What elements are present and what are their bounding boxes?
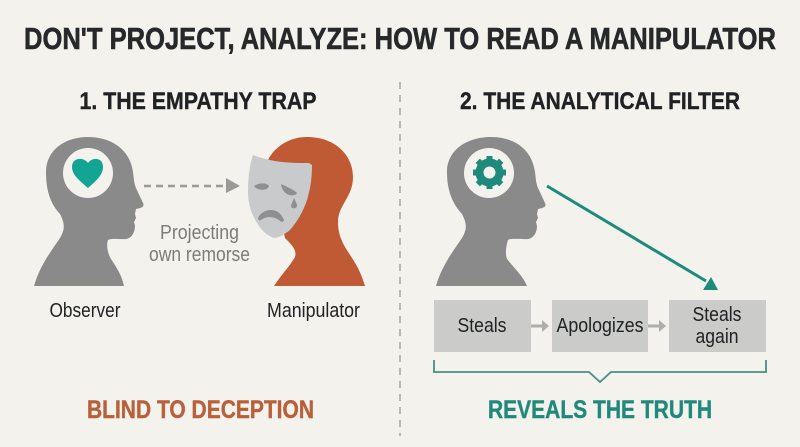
- verdict: reveals the truth: REVEALS THE TRUTH: [488, 396, 712, 424]
- box: steals: [434, 300, 531, 352]
- text: projecting own remorse: [149, 222, 250, 266]
- panel: manipulator figure: [248, 137, 365, 286]
- icon: heart: [72, 159, 103, 188]
- heading: the analytical filter: 2. THE ANALYTICAL FILTER: [460, 88, 740, 115]
- box: apologizes: [552, 300, 648, 352]
- box: steals again: [669, 300, 766, 352]
- bracket: [434, 360, 766, 382]
- panel: observer figure: [34, 137, 144, 286]
- arrow: projection: [144, 178, 240, 193]
- label: observer: Observer: [50, 300, 121, 322]
- box: steals again: again: [696, 326, 738, 348]
- text: projecting own remorse: own remorse: [149, 244, 250, 266]
- box: steals: Steals: [458, 315, 506, 337]
- panel: analyst figure: [436, 137, 546, 286]
- arrow: analysis to pattern: [547, 186, 718, 290]
- verdict: blind to deception: BLIND TO DECEPTION: [87, 396, 314, 424]
- heading: the empathy trap: 1. THE EMPATHY TRAP: [80, 88, 316, 115]
- box: steals again: Steals: [692, 304, 742, 326]
- arrow: steals to apologizes: [531, 320, 549, 332]
- label: manipulator: Manipulator: [267, 300, 360, 322]
- icon: crying mask: [248, 155, 312, 238]
- box: apologizes: Apologizes: [556, 315, 644, 337]
- icon: gear: [473, 156, 506, 189]
- text: projecting own remorse: Projecting: [160, 222, 239, 244]
- arrow: apologizes to steals again: [648, 320, 666, 332]
